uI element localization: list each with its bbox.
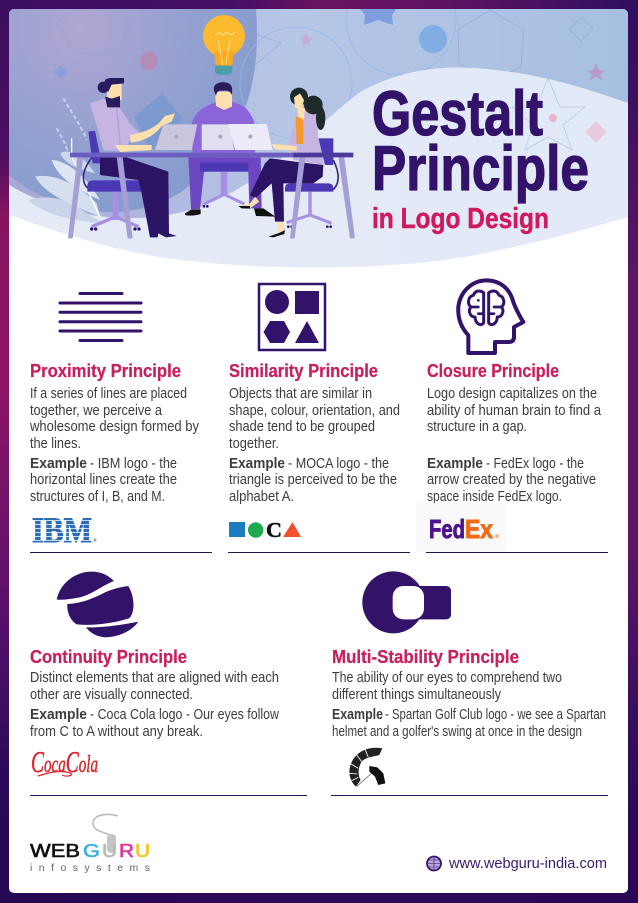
description: continuity: Distinct elements that are aligned with each [30, 670, 279, 686]
laptops [155, 124, 273, 150]
table [68, 153, 355, 238]
description: similarity: shade tend to be grouped [229, 419, 375, 435]
description: closure: - FedEx logo - the [486, 456, 584, 472]
panel: similarity principle [228, 284, 410, 552]
description: multi-stability: different things simultaneously [332, 687, 502, 703]
heading: multi-stability: Multi-Stability Principle [332, 647, 519, 667]
description: proximity [29, 386, 200, 505]
description: proximity: the lines. [30, 436, 81, 452]
description: continuity: - Coca Cola logo - Our eyes follow [90, 707, 279, 723]
icon: shapes in a box [259, 284, 325, 350]
description: similarity: alphabet A. [229, 489, 294, 505]
title: Principle [372, 134, 589, 204]
description: similarity: triangle is perceived to be the [229, 472, 397, 488]
description: closure: ability of human brain to find a [427, 403, 602, 419]
logo: FedEx [416, 503, 507, 552]
man centre [185, 82, 262, 216]
description: continuity: other are visually connected. [30, 687, 193, 703]
description: similarity: Objects that are similar in [229, 386, 372, 402]
description: closure: space inside FedEx logo. [427, 489, 562, 505]
description: similarity: - MOCA logo - the [288, 456, 389, 472]
man left [90, 78, 177, 237]
description: closure: Logo design capitalizes on the [427, 386, 597, 402]
description: multi-stability [332, 670, 606, 740]
description: closure: structure in a gap. [427, 419, 527, 435]
woman right [238, 88, 338, 237]
description: continuity [30, 670, 279, 740]
logo: FedEx: Fed [429, 514, 465, 544]
divider [331, 794, 608, 796]
description: closure [427, 386, 602, 505]
wordmark [30, 841, 150, 861]
website link [427, 855, 607, 872]
description: similarity: Example [229, 456, 285, 472]
heading: continuity: Continuity Principle [30, 647, 187, 667]
url: www.webguru-india.com [448, 855, 607, 872]
description: similarity: shape, colour, orientation, and [229, 403, 400, 419]
icon: head with brain [458, 280, 523, 353]
title: Gestalt [372, 79, 543, 149]
description: proximity: Example [30, 456, 87, 472]
panel: multi-stability principle [331, 571, 608, 796]
wordmark: U [135, 841, 150, 861]
panel: closure principle [416, 280, 608, 552]
icon: stacked lines [60, 294, 141, 340]
logo: FedEx: Ex [465, 514, 493, 544]
description: similarity: together. [229, 436, 279, 452]
description: closure: Example [427, 456, 483, 472]
wordmark: G [83, 841, 100, 861]
logo: Spartan golf [349, 747, 385, 787]
header illustration background [9, 9, 628, 268]
logo: WebGuru infosystems [30, 814, 150, 874]
description: proximity: structures of I, B, and M. [30, 489, 165, 505]
logo: IBM: IBM [32, 510, 92, 550]
description: similarity [229, 386, 400, 505]
icon: globe [427, 856, 441, 870]
icon: sliced globe [57, 572, 138, 637]
description: proximity: If a series of lines are placed [30, 386, 187, 402]
divider [30, 794, 307, 796]
plant [28, 98, 103, 223]
description: proximity: wholesome design formed by [29, 419, 200, 435]
wordmark: R [119, 841, 134, 861]
heading: closure: Closure Principle [427, 361, 559, 381]
panel: proximity principle [29, 294, 212, 552]
description: multi-stability: helmet and a golfer's swing at once in the design [332, 724, 582, 740]
title [372, 79, 589, 235]
description: proximity: horizontal lines create the [30, 472, 177, 488]
description: closure: arrow created by the negative [427, 472, 596, 488]
divider [228, 552, 410, 554]
divider [426, 552, 608, 554]
tagline: infosystems [30, 862, 150, 874]
description: multi-stability: The ability of our eyes to comprehend two [332, 670, 562, 686]
description: continuity: from C to A without any break. [30, 724, 203, 740]
description: continuity: Example [30, 707, 87, 723]
mouse and cable [93, 814, 118, 853]
logo: Coca-Cola: CocaCola [31, 744, 98, 779]
logo: MOCA [229, 518, 301, 542]
heading: proximity: Proximity Principle [30, 361, 181, 381]
heading: similarity: Similarity Principle [229, 361, 378, 381]
title: in Logo Design [372, 203, 549, 235]
description: multi-stability: Example [332, 707, 383, 723]
panel: continuity principle [30, 572, 307, 796]
wordmark: WEB [30, 841, 80, 861]
description: proximity: - IBM logo - the [90, 456, 177, 472]
divider [30, 552, 212, 554]
left chair [83, 131, 142, 231]
wordmark: U [102, 841, 117, 861]
icon: circle and rounded rectangle [362, 571, 451, 633]
light bulb [203, 15, 245, 75]
description: proximity: together, we perceive a [30, 403, 163, 419]
logo: MOCA: C [266, 518, 282, 542]
illustration: team at table with light bulb [28, 15, 355, 238]
